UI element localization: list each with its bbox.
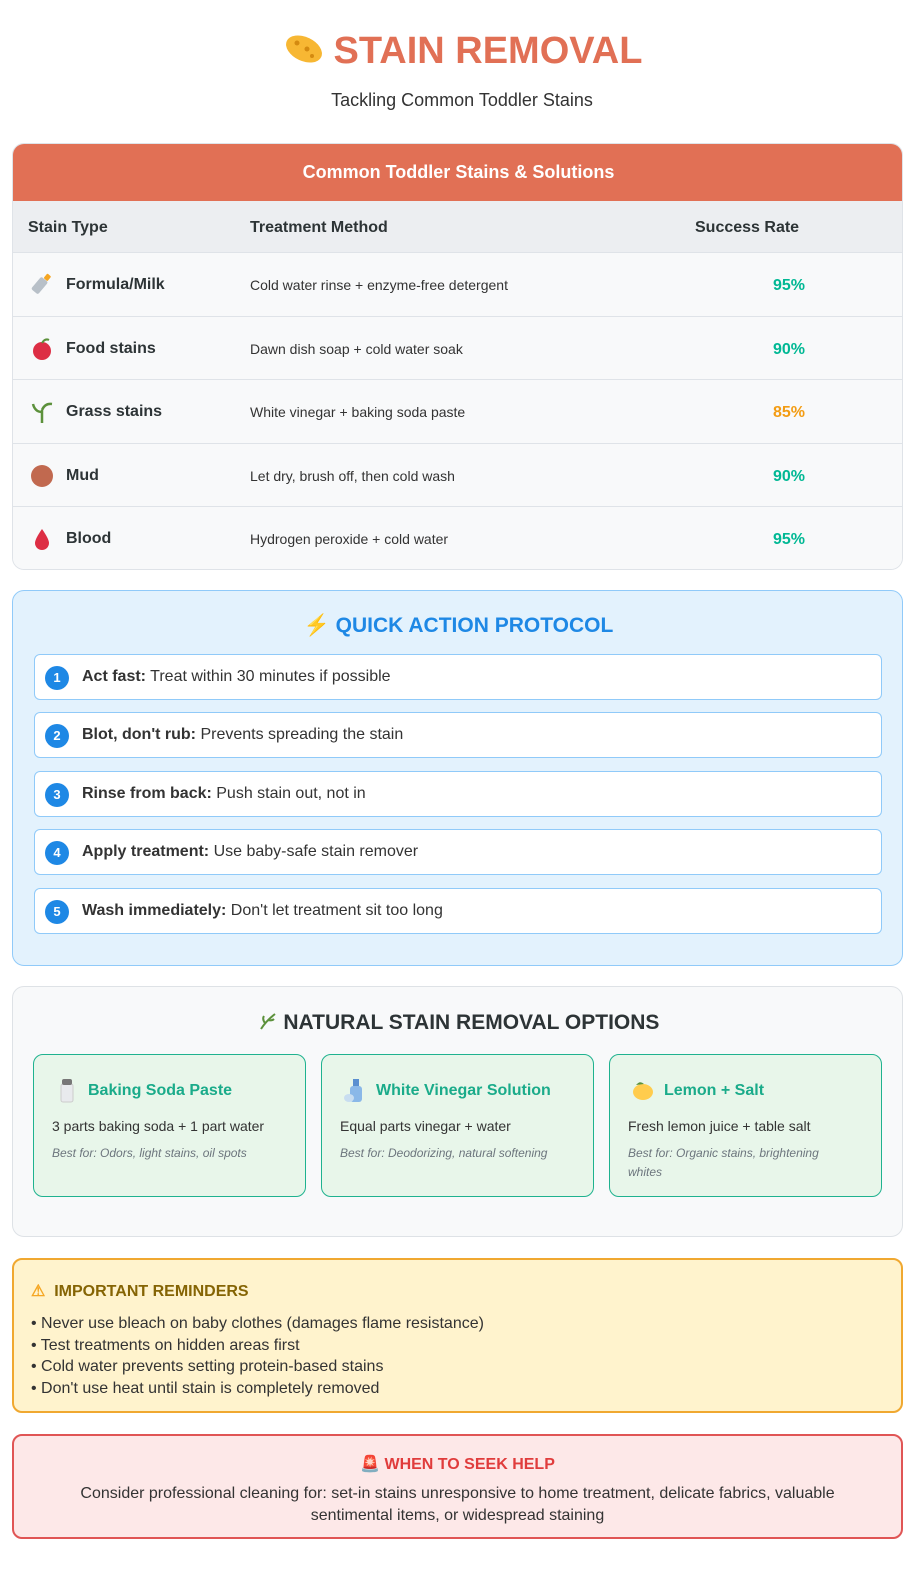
table header [13, 144, 904, 201]
card: vinegar: White Vinegar Solution [376, 1082, 551, 1099]
step 5: Wash immediately: Don't let treatment sit too long [82, 902, 443, 919]
list [31, 1315, 484, 1397]
list: • Test treatments on hidden areas first [31, 1337, 300, 1354]
heading: ⚡ QUICK ACTION PROTOCOL [304, 614, 613, 637]
row: mud [13, 443, 903, 506]
row: mud: Mud [66, 467, 99, 484]
heading: NATURAL STAIN REMOVAL OPTIONS [283, 1011, 659, 1034]
panel: stains table [12, 143, 903, 570]
step 3: 3 [53, 787, 61, 802]
row: formula: Cold water rinse + enzyme-free detergent [250, 277, 508, 293]
table header: Common Toddler Stains & Solutions [303, 162, 614, 182]
step 2 [34, 712, 882, 758]
step 2: Blot, don't rub: Prevents spreading the stain [82, 726, 403, 743]
card: lemon [609, 1054, 882, 1197]
row: blood: 95% [773, 531, 805, 548]
heading: 🚨 WHEN TO SEEK HELP [360, 1456, 555, 1473]
card: baking soda: 3 parts baking soda + 1 part water [52, 1118, 264, 1134]
column headers: Stain Type [28, 219, 108, 236]
card: lemon: Best for: Organic stains, brightening whites [628, 1146, 819, 1179]
list: • Don't use heat until stain is completely removed [31, 1380, 379, 1397]
step 1 [34, 654, 882, 700]
heading: ⚠ IMPORTANT REMINDERS [31, 1283, 249, 1300]
row: mud: Let dry, brush off, then cold wash [250, 468, 455, 484]
card: vinegar: Best for: Deodorizing, natural softening [340, 1146, 547, 1160]
column headers: Treatment Method [250, 219, 388, 236]
row: food [13, 316, 903, 379]
row: formula: 95% [773, 277, 805, 294]
text: Consider professional cleaning for: set-in stains unresponsive to home treatment, delicate fabrics, valuable sentimental items, or widespread staining [80, 1485, 835, 1524]
column headers: Success Rate [695, 219, 799, 236]
row: blood [13, 506, 903, 569]
row: formula: Formula/Milk [66, 276, 165, 293]
step 3: Rinse from back: Push stain out, not in [82, 785, 366, 802]
panel: important reminders [12, 1258, 903, 1413]
row: food: Dawn dish soap + cold water soak [250, 341, 463, 357]
card: baking soda: Baking Soda Paste [88, 1082, 232, 1099]
icon: sponge [286, 36, 322, 62]
step 5: 5 [53, 904, 61, 919]
row: blood: Blood [66, 530, 111, 547]
row: blood: Hydrogen peroxide + cold water [250, 531, 448, 547]
row: grass: 85% [773, 404, 805, 421]
row: grass: Grass stains [66, 403, 162, 420]
step 1: 1 [53, 670, 61, 685]
row: mud: 90% [773, 468, 805, 485]
step 3 [34, 771, 882, 817]
card: lemon: Fresh lemon juice + table salt [628, 1118, 810, 1134]
column headers [13, 201, 904, 253]
card: baking soda: Best for: Odors, light stains, oil spots [52, 1146, 247, 1160]
step 1: Act fast: Treat within 30 minutes if possible [82, 668, 391, 685]
step 4 [34, 829, 882, 875]
row: grass [13, 379, 903, 442]
card: vinegar [321, 1054, 594, 1197]
panel: natural options [12, 986, 903, 1237]
step 4: 4 [53, 845, 61, 860]
panel: when to seek help [12, 1434, 903, 1539]
subtitle: Tackling Common Toddler Stains [331, 90, 593, 110]
card: lemon: Lemon + Salt [664, 1082, 764, 1099]
step 2: 2 [53, 728, 61, 743]
card: baking soda [33, 1054, 306, 1197]
panel: quick action protocol [12, 590, 903, 966]
row: food: 90% [773, 341, 805, 358]
step 4: Apply treatment: Use baby-safe stain remover [82, 843, 418, 860]
card: vinegar: Equal parts vinegar + water [340, 1118, 511, 1134]
row: formula [13, 252, 903, 315]
list: • Cold water prevents setting protein-based stains [31, 1358, 383, 1375]
title: STAIN REMOVAL [334, 30, 642, 72]
row: grass: White vinegar + baking soda paste [250, 404, 465, 420]
list: • Never use bleach on baby clothes (damages flame resistance) [31, 1315, 484, 1332]
row: food: Food stains [66, 340, 156, 357]
step 5 [34, 888, 882, 934]
